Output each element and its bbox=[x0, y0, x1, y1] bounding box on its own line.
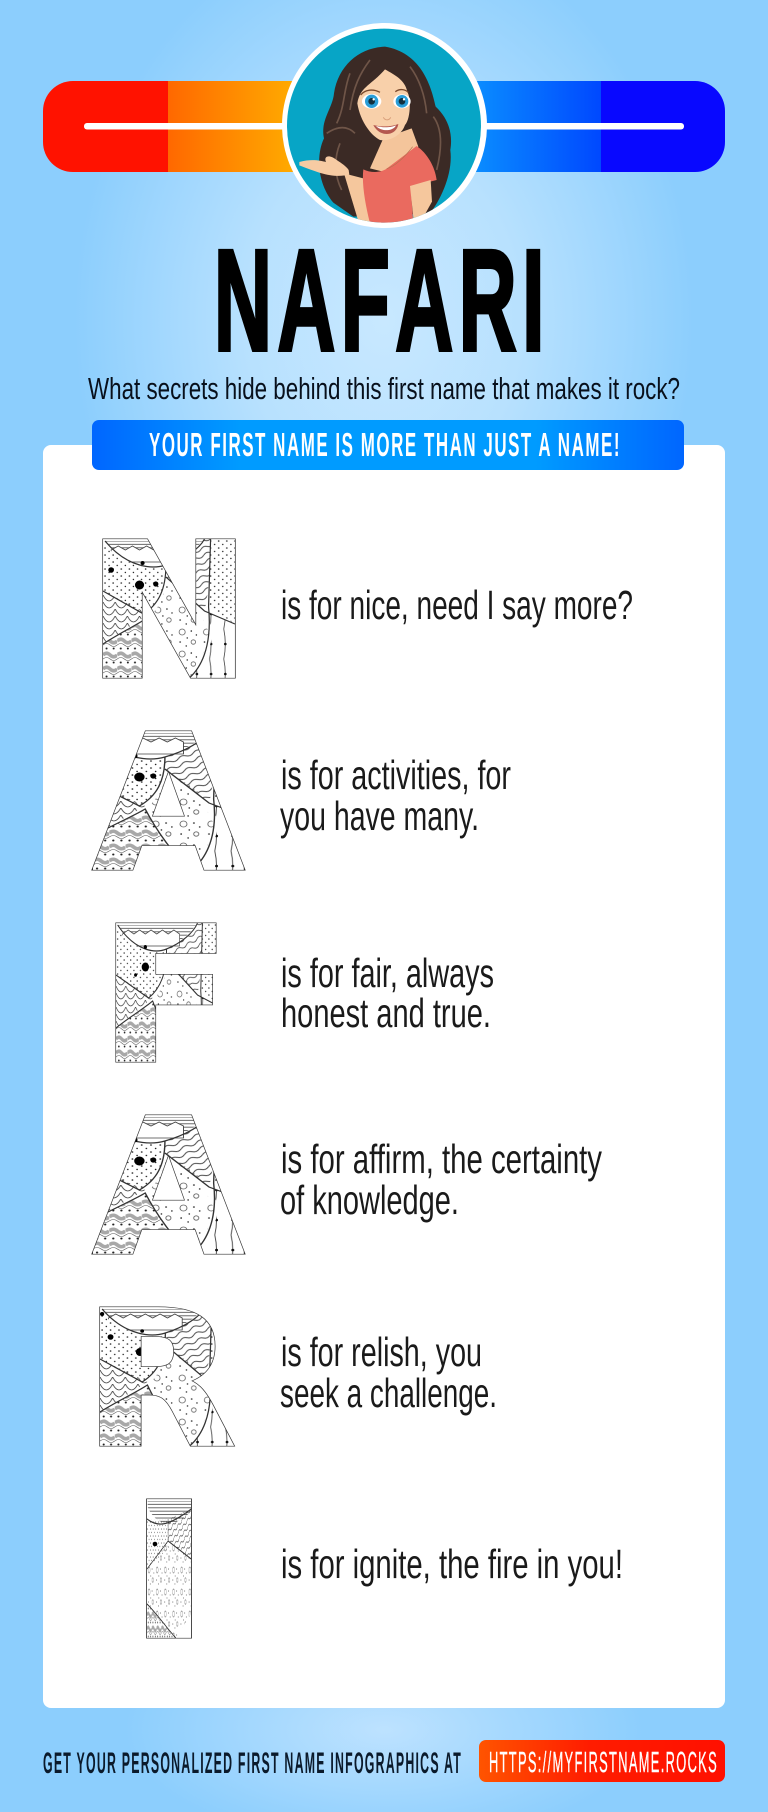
bar: blue segment bbox=[476, 81, 601, 172]
icon: patterned letter N: N bbox=[87, 504, 251, 720]
icon: patterned letter A bbox=[91, 1114, 246, 1254]
footer call to action bbox=[43, 1740, 725, 1782]
text: second A line: is for affirm, the certainty bbox=[281, 1136, 602, 1182]
row: A bbox=[93, 696, 511, 912]
row: R bbox=[84, 1272, 497, 1488]
icon: patterned letter F bbox=[115, 922, 216, 1062]
icon: portrait of smiling woman in circle bbox=[282, 23, 487, 228]
row: N bbox=[87, 504, 633, 720]
text: R line bbox=[280, 1329, 497, 1416]
text: F line: honest and true. bbox=[281, 990, 491, 1036]
icon: patterned letter I bbox=[146, 1498, 192, 1638]
text: R line: is for relish, you bbox=[281, 1329, 482, 1375]
icon: patterned letter A bbox=[91, 730, 246, 870]
text: I line: is for ignite, the fire in you! bbox=[281, 1541, 623, 1587]
icon: patterned letter R: R bbox=[84, 1272, 235, 1488]
text: second A line bbox=[280, 1136, 602, 1223]
icon: patterned letter R bbox=[99, 1306, 236, 1446]
icon: patterned letter A: A bbox=[94, 696, 243, 912]
button: website link bbox=[479, 1740, 725, 1782]
bar: orange segment bbox=[168, 81, 293, 172]
row: F bbox=[101, 889, 494, 1105]
text: A line: is for activities, for bbox=[281, 752, 511, 798]
icon: patterned letter N bbox=[102, 538, 236, 678]
icon: patterned letter F: F bbox=[101, 889, 230, 1105]
text: F line: is for fair, always bbox=[281, 950, 494, 996]
text: A line: you have many. bbox=[280, 793, 479, 839]
row: second A bbox=[93, 1080, 602, 1296]
bar: white line bbox=[84, 123, 684, 130]
icon: patterned letter A: A bbox=[94, 1080, 243, 1296]
bar: red segment bbox=[43, 81, 168, 172]
header bar bbox=[43, 81, 725, 172]
row: I bbox=[146, 1498, 620, 1638]
text: A line bbox=[280, 752, 511, 839]
text: R line: seek a challenge. bbox=[280, 1370, 497, 1416]
text: F line bbox=[281, 950, 494, 1036]
banner bbox=[92, 420, 684, 470]
bar: dark blue segment bbox=[601, 81, 725, 172]
text: second A line: of knowledge. bbox=[280, 1177, 459, 1223]
panel: white content card bbox=[43, 445, 725, 1708]
icon: patterned letter I: I bbox=[130, 1465, 209, 1681]
